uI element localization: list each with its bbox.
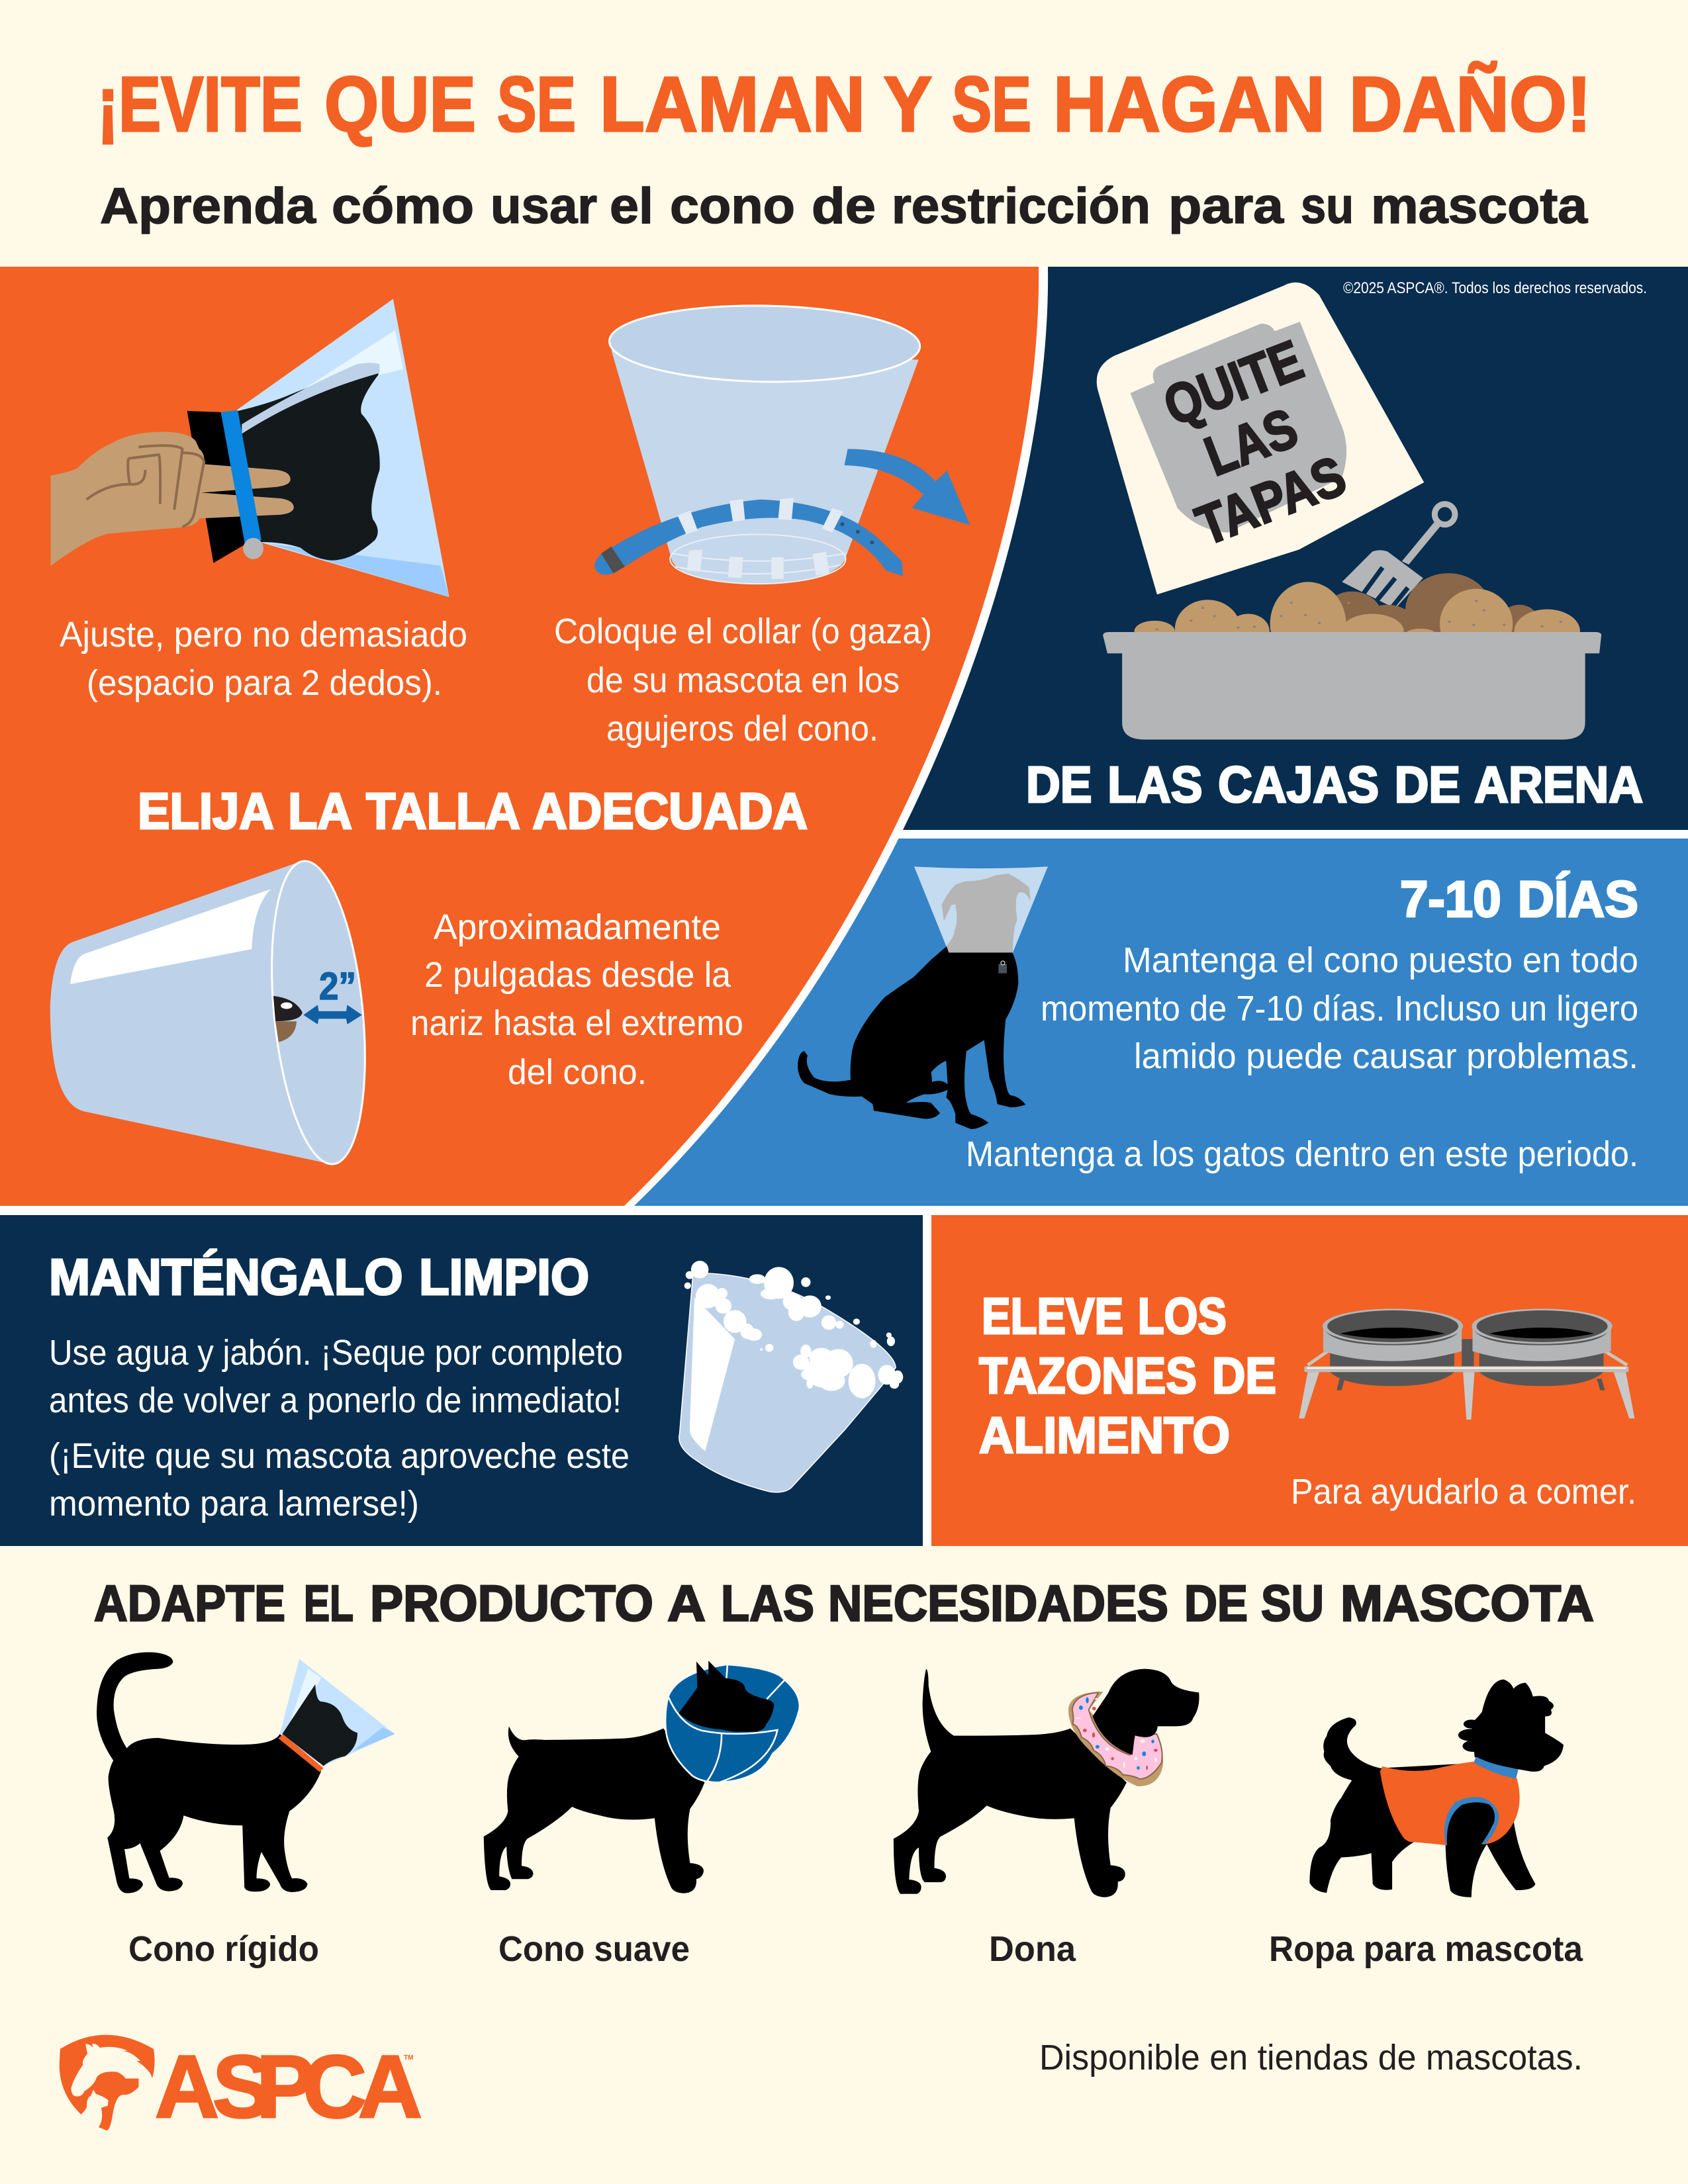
- subtitle: [100, 178, 1588, 234]
- title: SE: [497, 61, 576, 148]
- subtitle: mascota: [1371, 178, 1588, 234]
- illustration: cat with rigid cone: [97, 1652, 395, 1893]
- heading: adapt the product: LAS: [721, 1575, 814, 1632]
- panel: 7-10 days background: [596, 839, 1688, 1206]
- caption: adjust: Ajuste, pero no demasiado: [60, 615, 467, 655]
- heading: adapt the product: [94, 1575, 1594, 1632]
- caption: place collar: agujeros del cono.: [606, 709, 878, 749]
- heading: adapt the product: MASCOTA: [1340, 1575, 1594, 1632]
- subtitle: de: [812, 178, 876, 234]
- heading: adapt the product: DE: [1184, 1575, 1248, 1632]
- heading: adapt the product: A: [667, 1575, 706, 1632]
- subtitle: restricción: [892, 178, 1150, 234]
- text: clean instructions: [49, 1333, 630, 1524]
- title: LAMAN: [600, 61, 865, 148]
- text: clean instructions: Use agua y jabón. ¡Seque por completo: [49, 1333, 623, 1373]
- illustration: dog wearing pet clothing: [1309, 1680, 1564, 1897]
- text: keep the cone on: Mantenga el cono puesto en todo: [1123, 940, 1638, 980]
- text: available in pet stores: Disponible en tiendas de mascotas.: [1039, 2038, 1583, 2077]
- caption: two inches: 2 pulgadas desde la: [424, 955, 731, 995]
- logo: ASPCA: ASPCA: [155, 2038, 422, 2136]
- title: ¡EVITE: [97, 61, 303, 148]
- caption: two inches: [410, 907, 743, 1092]
- subtitle: el: [610, 178, 653, 234]
- title: [97, 61, 1591, 148]
- illustration: litter box lid: TAPAS: [1188, 444, 1354, 557]
- label: soft cone: Cono suave: [498, 1929, 690, 1969]
- caption: adjust: (espacio para 2 dedos).: [87, 663, 442, 703]
- panel: raise the bowls: [931, 1215, 1688, 1546]
- copyright: ©2025 ASPCA®. Todos los derechos reservados.: [1343, 279, 1647, 297]
- caption: two inches: Aproximadamente: [434, 907, 721, 947]
- heading: 7-10 days: 7-10 DÍAS: [1400, 871, 1638, 928]
- text: keep the cone on: momento de 7-10 días. Incluso un ligero: [1041, 989, 1638, 1028]
- text: keep the cone on: [1041, 940, 1638, 1076]
- illustration: litter box lid: LAS: [1197, 396, 1305, 488]
- heading: adapt the product: NECESIDADES: [828, 1575, 1168, 1632]
- heading: adapt the product: SU: [1261, 1575, 1324, 1632]
- label: donut: Dona: [989, 1929, 1076, 1969]
- logo: ASPCA: TM: [404, 2054, 413, 2062]
- illustration: raised bowls: [1299, 1308, 1634, 1420]
- illustration: cone with two-inch measure: [50, 857, 377, 1168]
- text: clean instructions: antes de volver a ponerlo de inmediato!: [49, 1381, 622, 1420]
- heading: litter box: DE LAS CAJAS DE ARENA: [1026, 756, 1643, 813]
- icon: ASPCA shield: [60, 2035, 155, 2130]
- caption: adjust: [60, 615, 467, 703]
- subtitle: para: [1168, 178, 1284, 234]
- illustration: dog with donut collar: [894, 1669, 1199, 1897]
- illustration: dog with soft cone: [484, 1661, 800, 1893]
- heading: choose size: ELIJA LA TALLA ADECUADA: [138, 783, 808, 840]
- heading: adapt the product: PRODUCTO: [370, 1575, 653, 1632]
- heading: raise the bowls: ELEVE LOS: [982, 1288, 1227, 1345]
- title: SE: [952, 61, 1031, 148]
- subtitle: su: [1301, 178, 1354, 234]
- heading: raise the bowls: TAZONES DE: [979, 1347, 1276, 1404]
- subtitle: cono: [670, 178, 795, 234]
- caption: place collar: Coloque el collar (o gaza): [554, 612, 932, 651]
- panel: litter box background: [861, 267, 1688, 830]
- title: Y: [884, 61, 932, 148]
- illustration: litter box lid: [1097, 283, 1424, 594]
- arrow: collar direction: [845, 449, 970, 525]
- heading: raise the bowls: [979, 1288, 1276, 1464]
- illustration: soapy cone: [679, 1261, 903, 1492]
- subtitle: Aprenda: [100, 178, 316, 234]
- illustration: litter box with scoop: [1103, 504, 1601, 740]
- title: QUE: [324, 61, 476, 148]
- heading: adapt the product: EL: [304, 1575, 353, 1632]
- panel: choose the right size: [0, 267, 1039, 1206]
- caption: place collar: de su mascota en los: [586, 660, 900, 700]
- text: clean instructions: momento para lamerse!): [49, 1484, 419, 1524]
- illustration: collar threaded through cone: [594, 302, 922, 584]
- text: clean instructions: (¡Evite que su mascota aproveche este: [49, 1436, 630, 1476]
- caption: two inches: nariz hasta el extremo: [410, 1003, 743, 1043]
- caption: to help eat: Para ayudarlo a comer.: [1291, 1472, 1636, 1512]
- text: keep the cone on: lamido puede causar problemas.: [1134, 1036, 1638, 1076]
- text: keep cats inside: Mantenga a los gatos dentro en este periodo.: [966, 1134, 1638, 1174]
- heading: raise the bowls: ALIMENTO: [979, 1407, 1230, 1464]
- subtitle: usar: [491, 178, 597, 234]
- illustration: hand fitting fingers under cone collar: [51, 299, 449, 597]
- label: rigid cone: Cono rígido: [128, 1929, 319, 1969]
- label: pet clothing: Ropa para mascota: [1269, 1929, 1583, 1969]
- panel: keep it clean: [0, 1215, 923, 1546]
- heading: keep it clean: MANTÉNGALO LIMPIO: [49, 1249, 589, 1306]
- subtitle: cómo: [332, 178, 474, 234]
- caption: place collar: [554, 612, 932, 749]
- heading: adapt the product: ADAPTE: [94, 1575, 285, 1632]
- illustration: seated dog with cone: [798, 866, 1048, 1129]
- illustration: litter box lid: QUITE: [1156, 328, 1311, 437]
- illustration: cone with two-inch measure: 2”: [319, 965, 356, 1008]
- title: DAÑO!: [1349, 61, 1591, 148]
- title: HAGAN: [1053, 61, 1325, 148]
- caption: two inches: del cono.: [508, 1052, 647, 1092]
